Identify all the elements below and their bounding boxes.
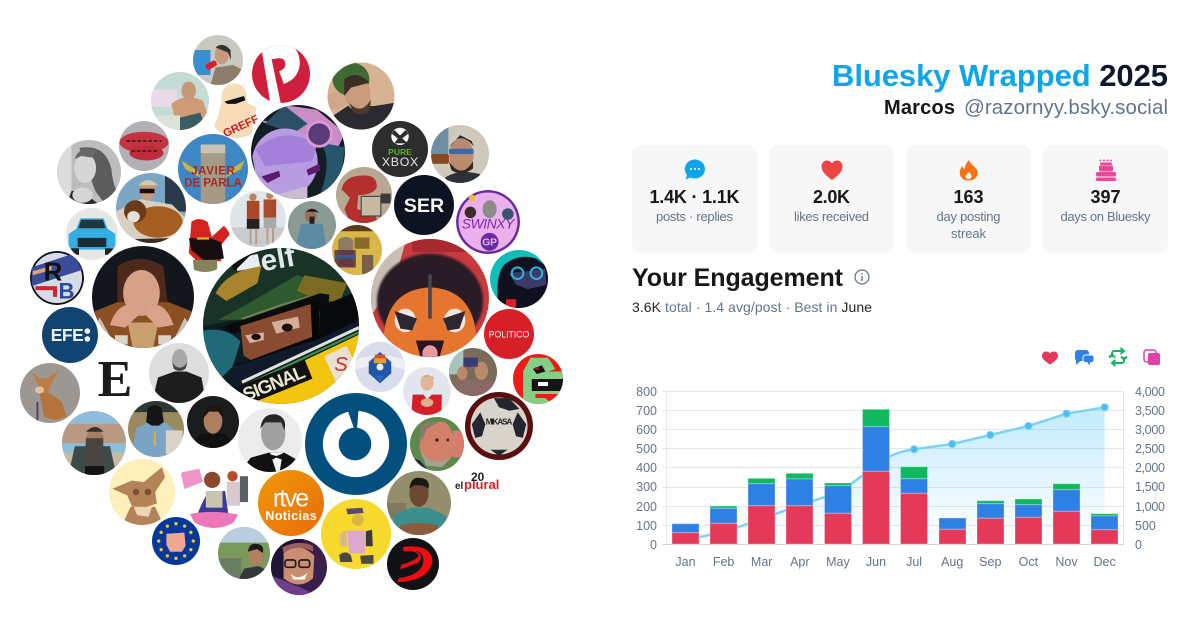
- avatar: man in dark jacket: [187, 396, 239, 448]
- right axis labels: 1,500: [1135, 480, 1165, 494]
- stat label: days on Bluesky: [1060, 209, 1151, 224]
- panel: posting streak: [906, 145, 1031, 253]
- avatar: Javier de Parla: DE PARLA: [184, 178, 243, 190]
- avatar: Politico: [484, 309, 534, 359]
- avatar: Senna in helmet: elf: [258, 240, 298, 278]
- avatar: smiling man with glasses: [271, 539, 327, 595]
- avatar: Senna in helmet: SIGNAL: [239, 361, 308, 405]
- user name: Marcos: [884, 97, 955, 119]
- avatar: bald man in suit: [149, 343, 209, 403]
- avatar: Greff cartoon: [214, 83, 260, 138]
- avatar: Hellboy: [188, 219, 230, 272]
- bars: Nov: [1053, 484, 1080, 544]
- avatar: SER logo: SER: [404, 196, 444, 217]
- engagement summary: 3.6K total · 1.4 avg/post · Best in June: [632, 299, 872, 315]
- avatar: yellow cat lady: [321, 499, 391, 569]
- left axis labels: 600: [636, 423, 657, 437]
- avatar: P logo: [252, 45, 310, 103]
- stat label: posts · replies: [656, 209, 734, 224]
- stacked bars: [672, 409, 1118, 544]
- month labels: Oct: [1019, 555, 1039, 569]
- avatar: rtve Noticias: rtve: [273, 484, 309, 512]
- avatar: RB logo: B: [58, 278, 74, 303]
- avatar: Eevee pixel: [109, 459, 175, 525]
- month labels: Jul: [906, 555, 922, 569]
- user handle: @razornyy.bsky.social: [964, 96, 1168, 119]
- stat label: day posting: [936, 209, 1000, 224]
- month labels: Dec: [1093, 555, 1116, 569]
- avatar: RB logo: [30, 251, 84, 305]
- month labels: Nov: [1055, 555, 1078, 569]
- icon: info: [855, 270, 869, 284]
- heading: your engagement: Your Engagement: [632, 264, 844, 292]
- stat value: 2.0K: [813, 187, 850, 207]
- month labels: Mar: [751, 555, 772, 569]
- avatar: Pure Xbox: PURE: [388, 147, 412, 157]
- avatar: woman in red dress: [403, 367, 451, 415]
- avatar: orange chainsaw dog character: [371, 239, 489, 362]
- avatar: blue sports car: [66, 208, 118, 260]
- right axis labels: 2,500: [1135, 442, 1165, 456]
- stat value: 163: [954, 187, 984, 207]
- bars: Oct: [1015, 499, 1042, 544]
- left axis labels: 500: [636, 442, 657, 456]
- month labels: Jun: [866, 555, 886, 569]
- avatar: Politico: POLITICO: [489, 329, 529, 340]
- avatar: red graffiti logo: [119, 121, 169, 171]
- bars: May: [824, 483, 852, 544]
- icon: reposts: [1109, 348, 1127, 366]
- bars: Feb: [710, 506, 737, 544]
- avatar: rtve Noticias: Noticias: [265, 509, 317, 523]
- avatar: Senna in helmet: S: [334, 354, 348, 376]
- left axis labels: 800: [636, 385, 657, 399]
- chart legend icons: [1042, 348, 1160, 366]
- right axis labels: 2,000: [1135, 461, 1165, 475]
- avatar: Darth Vader head man: [128, 401, 184, 457]
- avatar: Vice City character: [387, 471, 451, 535]
- avatar: elplural logo: 20: [471, 470, 485, 484]
- stat value: 397: [1090, 187, 1120, 207]
- avatar: man with tablet: [449, 348, 497, 396]
- avatar: man with headset: [193, 35, 243, 85]
- month labels: Apr: [790, 555, 810, 569]
- stat value: 1.4K · 1.1K: [650, 187, 740, 207]
- avatar: shirtless man on phone: [151, 72, 209, 130]
- month labels: Aug: [941, 555, 963, 569]
- avatar: man with big dog: [116, 173, 186, 243]
- left axis labels: 200: [636, 500, 657, 514]
- avatar: purple girl: [251, 105, 345, 199]
- avatar: two men in shorts: [230, 191, 286, 247]
- avatar: man by canal: [218, 527, 270, 579]
- left axis labels: 700: [636, 404, 657, 418]
- right axis labels: 3,000: [1135, 423, 1165, 437]
- panel: posts and replies: [632, 145, 757, 253]
- cumulative area: [686, 407, 1105, 544]
- avatar: bearded man leaning: [326, 62, 394, 130]
- avatar: man pulling a smile: [92, 246, 194, 348]
- avatar: man's close-up head: [410, 417, 464, 471]
- bars: Jul: [900, 467, 928, 544]
- avatar: Javier de Parla: JAVIER: [191, 165, 236, 177]
- panel: likes received: [769, 145, 894, 253]
- avatar bubble cluster: [20, 35, 563, 595]
- avatar: man in blue sunglasses drinking: [431, 125, 489, 183]
- avatar: Javier de Parla: [178, 134, 248, 204]
- cumulative points: [910, 404, 1108, 453]
- avatar: Senna in helmet: [203, 240, 359, 407]
- avatar: red dinosaur sketch: [336, 167, 392, 223]
- right axis labels: 0: [1135, 538, 1142, 552]
- left axis labels: [636, 385, 657, 552]
- avatar: red swirl logo: [387, 538, 439, 590]
- avatar: blue ring logo: [305, 393, 407, 495]
- avatar: Pure Xbox: XBOX: [382, 155, 418, 169]
- avatar: Swinxy GP: GP: [482, 238, 497, 249]
- icon: quotes: [1144, 350, 1160, 365]
- icon: cake: [1096, 160, 1116, 181]
- avatar: mirror selfie: [288, 201, 336, 249]
- month labels: Jan: [675, 555, 696, 569]
- icon: replies: [1075, 350, 1094, 366]
- bars: Sep: [977, 501, 1004, 544]
- avatar: woman black and white: [57, 140, 121, 204]
- right axis labels: 4,000: [1135, 385, 1165, 399]
- avatar: Greff cartoon: GREFF: [221, 113, 261, 140]
- right axis labels: 3,500: [1135, 404, 1165, 418]
- month labels: May: [826, 555, 850, 569]
- icon: flame: [960, 160, 978, 180]
- bars: Jan: [672, 524, 699, 544]
- engagement chart: [636, 385, 1165, 569]
- icon: heart: [822, 160, 842, 180]
- avatar: EU fist: [152, 517, 200, 565]
- right axis labels: [1135, 385, 1165, 552]
- avatar: anime knight: [177, 454, 251, 528]
- icon: speech bubble: [685, 159, 705, 180]
- avatar: long-bearded man: [62, 411, 126, 475]
- right axis labels: 1,000: [1135, 500, 1165, 514]
- avatar: rtve Noticias: [258, 470, 324, 536]
- bars: Jun: [862, 409, 890, 544]
- avatar: Mikasa football: [465, 392, 533, 460]
- avatar: EFE logo: EFE: [51, 325, 84, 345]
- avatar: Mikasa football: MIKASA: [486, 417, 512, 426]
- month labels: Feb: [713, 555, 734, 569]
- avatar: elplural logo: plural: [464, 477, 499, 492]
- bars: Mar: [748, 478, 775, 544]
- left axis labels: 400: [636, 461, 657, 475]
- avatar: RB logo: R: [44, 259, 63, 287]
- bars: Apr: [786, 473, 813, 544]
- right axis labels: 500: [1135, 519, 1156, 533]
- avatar: Swinxy GP: SWINXY: [462, 215, 516, 231]
- panel: days on Bluesky: [1043, 145, 1168, 253]
- avatar: Darth Vader on teal: [490, 250, 548, 308]
- avatar: tuxedo man: [238, 408, 302, 472]
- stat label: likes received: [794, 209, 869, 224]
- avatar: E serif logo: E: [98, 351, 132, 408]
- stat label line two: streak: [951, 226, 986, 241]
- month labels: [675, 555, 1116, 569]
- avatar: pixel green dinosaur: [513, 354, 563, 404]
- left axis labels: 100: [636, 519, 657, 533]
- avatar: Simpsons-style character: [332, 225, 382, 275]
- left axis labels: 300: [636, 480, 657, 494]
- avatar: EFE logo: [42, 307, 98, 363]
- avatar: SER logo: [394, 175, 454, 235]
- title: Bluesky Wrapped 2025: [832, 58, 1168, 93]
- cumulative line: [686, 407, 1105, 540]
- icon: likes: [1042, 352, 1058, 364]
- avatar: Swinxy GP: [456, 190, 520, 254]
- month labels: Sep: [979, 555, 1001, 569]
- avatar: Pure Xbox: [372, 121, 428, 177]
- bars: Dec: [1091, 514, 1118, 544]
- left axis labels: 0: [650, 538, 657, 552]
- avatar: elplural logo: [455, 470, 499, 492]
- avatar: gamer cube logo: [355, 342, 405, 392]
- avatar: tan dog: [20, 363, 80, 423]
- bars: Aug: [939, 518, 966, 544]
- avatar: elplural logo: el: [455, 481, 464, 492]
